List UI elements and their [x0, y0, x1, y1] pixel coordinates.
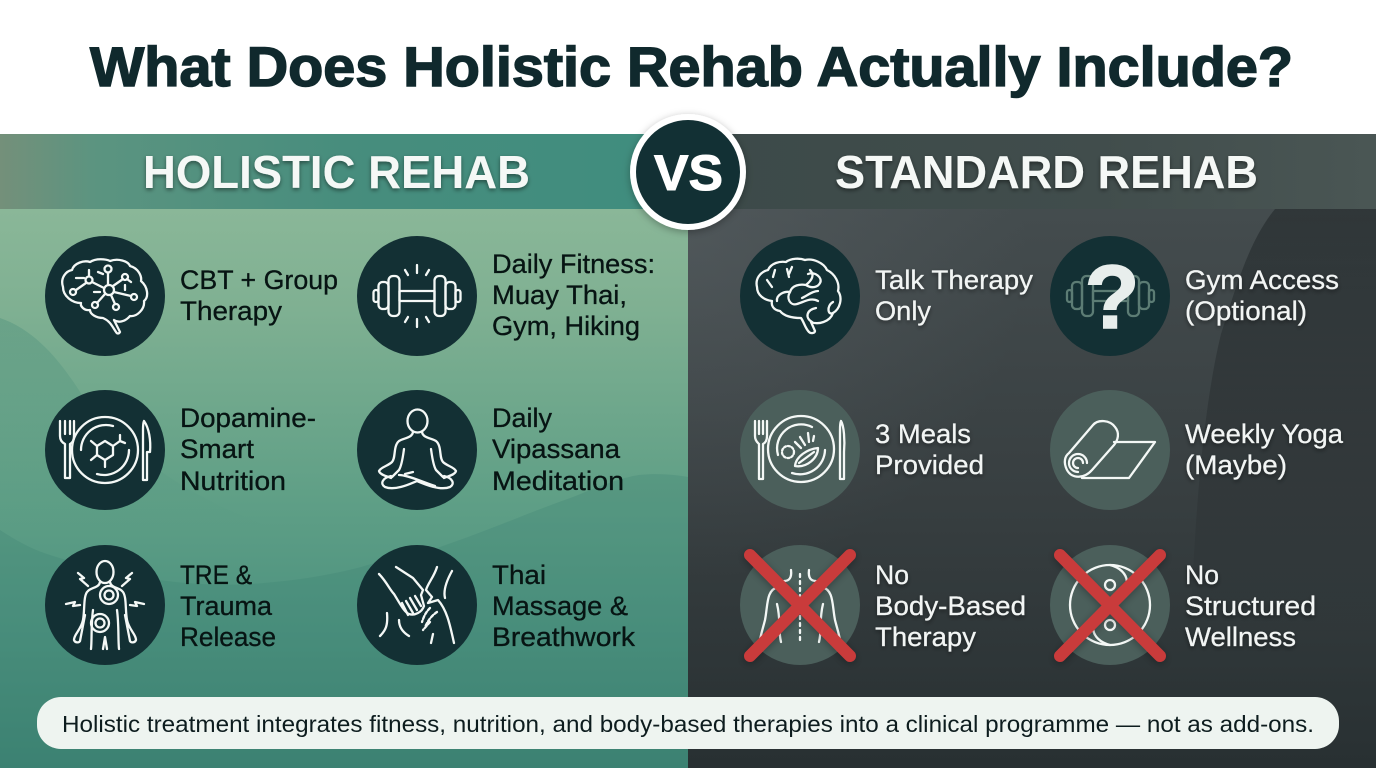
text: CBT + Group Therapy: Therapy: [180, 296, 283, 326]
panel background: holistic: [0, 209, 688, 768]
callout: summary: [37, 697, 1339, 749]
text: No Structured Wellness: [1185, 560, 1316, 652]
icon: red cross: [1060, 555, 1160, 656]
text: Daily Fitness: Muay Thai,: [492, 280, 627, 310]
panel: holistic rehab: [0, 134, 688, 768]
text: Thai Massage and Breathwork: [492, 560, 636, 652]
header band: holistic: [0, 134, 688, 209]
text: TRE and Trauma Release: TRE &: [180, 560, 252, 590]
text: Weekly Yoga: (Maybe): [1185, 450, 1287, 480]
title: What Does Holistic Rehab Actually Include?: [90, 35, 1293, 98]
text: Thai Massage and Breathwork: Thai: [492, 560, 546, 590]
text: Daily Vipassana Meditation: Vipassana: [492, 434, 621, 464]
text: CBT + Group Therapy: CBT + Group: [180, 265, 338, 295]
text: CBT + Group Therapy: [180, 265, 338, 326]
item: Gym Access question: ?: [1085, 248, 1139, 348]
text: No Body-Based Therapy: Body-Based: [875, 591, 1026, 621]
text: No Body-Based Therapy: Therapy: [875, 622, 976, 652]
item: Gym Access question: [1050, 236, 1170, 356]
text: Daily Fitness: [492, 249, 655, 341]
text: Gym Access Optional: Gym Access: [1185, 265, 1339, 295]
text: Thai Massage and Breathwork: Breathwork: [492, 622, 636, 652]
item: 3 Meals Provided: [740, 390, 860, 510]
heading: standard rehab: STANDARD REHAB: [835, 146, 1258, 198]
icon: red cross: [750, 555, 850, 656]
text: TRE and Trauma Release: [180, 560, 276, 652]
item: Daily Fitness: [357, 236, 477, 356]
text: Talk Therapy Only: Only: [875, 296, 931, 326]
callout: summary: Holistic treatment integrates fitness, nutrition, and body-based therapies into a clinical programme — not as add-ons.: [62, 711, 1314, 737]
text: Thai Massage and Breathwork: Massage &: [492, 591, 628, 621]
item: CBT + Group Therapy: [45, 236, 165, 356]
text: Dopamine-Smart Nutrition: [180, 403, 316, 496]
text: No Body-Based Therapy: No: [875, 560, 909, 590]
text: Weekly Yoga: Weekly Yoga: [1185, 419, 1344, 449]
item: TRE and Trauma Release: [45, 545, 165, 665]
text: Gym Access Optional: [1185, 265, 1339, 326]
text: 3 Meals Provided: 3 Meals: [875, 419, 971, 449]
item: Weekly Yoga: [1050, 390, 1170, 510]
panel background: standard: [688, 209, 1376, 768]
text: No Structured Wellness: Structured: [1185, 591, 1316, 621]
item: Thai Massage and Breathwork: [357, 545, 477, 665]
text: Dopamine-Smart Nutrition: Smart: [180, 434, 255, 464]
text: Talk Therapy Only: Talk Therapy: [875, 265, 1034, 295]
text: Gym Access Optional: (Optional): [1185, 296, 1307, 326]
text: TRE and Trauma Release: Trauma: [180, 591, 273, 621]
header band: standard: [688, 134, 1376, 209]
text: Daily Fitness: Daily Fitness:: [492, 249, 655, 279]
text: Daily Vipassana Meditation: [492, 403, 624, 496]
item: Daily Vipassana Meditation: [357, 390, 477, 510]
heading: holistic rehab: HOLISTIC REHAB: [143, 146, 530, 198]
VS badge: VS: [654, 145, 723, 201]
text: No Body-Based Therapy: [875, 560, 1026, 652]
text: Dopamine-Smart Nutrition: Dopamine-: [180, 403, 316, 433]
text: Daily Vipassana Meditation: Daily: [492, 403, 552, 433]
text: Daily Fitness: Gym, Hiking: [492, 311, 640, 341]
panel: standard rehab: [688, 134, 1376, 768]
text: Weekly Yoga: [1185, 419, 1344, 480]
item: No Structured Wellness: [1050, 545, 1170, 665]
text: Dopamine-Smart Nutrition: Nutrition: [180, 466, 286, 496]
item: No Body-Based Therapy: [740, 545, 860, 665]
text: Talk Therapy Only: [875, 265, 1034, 326]
VS badge: [630, 114, 746, 230]
text: TRE and Trauma Release: Release: [180, 622, 276, 652]
text: 3 Meals Provided: Provided: [875, 450, 984, 480]
text: No Structured Wellness: Wellness: [1185, 622, 1296, 652]
text: No Structured Wellness: No: [1185, 560, 1219, 590]
text: 3 Meals Provided: [875, 419, 984, 480]
item: Dopamine-Smart Nutrition: [45, 390, 165, 510]
text: Daily Vipassana Meditation: Meditation: [492, 466, 624, 496]
item: Talk Therapy Only: [740, 236, 860, 356]
